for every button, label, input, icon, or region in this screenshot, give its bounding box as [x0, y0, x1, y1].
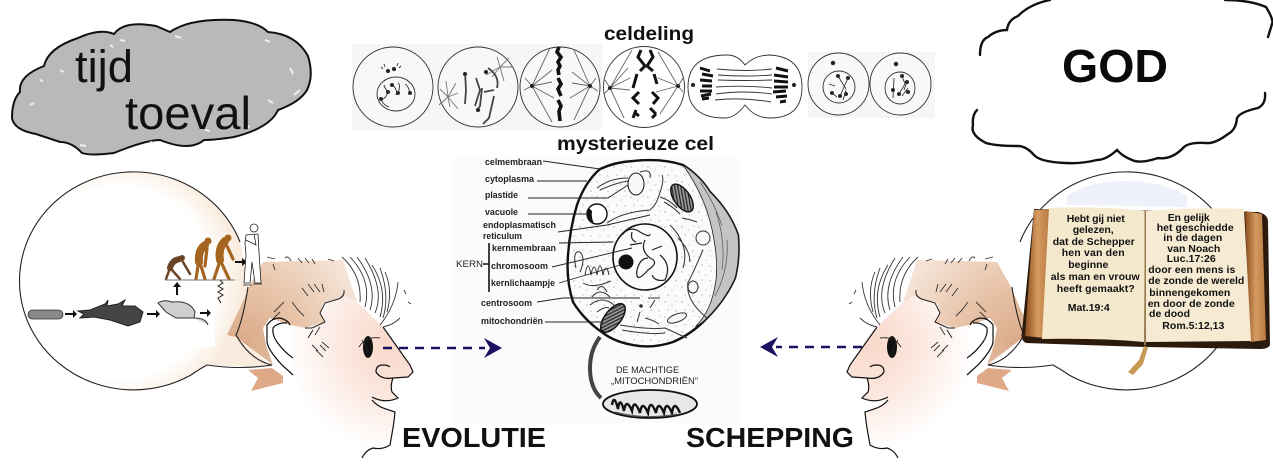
heading: celdeling: celdeling	[604, 24, 694, 45]
text: tijd: tijd	[75, 41, 133, 92]
plastide	[628, 173, 644, 195]
evolution chain	[28, 224, 262, 347]
left page text: heeft gemaakt?	[1057, 283, 1135, 295]
right page text: Rom.5:12,13	[1162, 320, 1224, 332]
eye	[359, 336, 380, 358]
arrow: right gaze	[760, 337, 878, 357]
hairline zigzag	[916, 290, 955, 338]
right page text: de dood	[1149, 308, 1190, 320]
icon: thinking man	[243, 224, 262, 285]
text: toeval: toeval	[125, 87, 251, 139]
left page text: als man en vrouw	[1051, 271, 1141, 283]
book cover	[1022, 209, 1270, 349]
cell labels: centrosoom	[481, 298, 532, 308]
right page text: Luc.17:26	[1167, 253, 1216, 265]
cell stage 5	[604, 46, 684, 128]
cell labels: kernlichaampje	[491, 278, 555, 288]
right page text: En gelijk	[1168, 212, 1210, 224]
right page text	[1148, 212, 1244, 332]
right page text: de zonde de wereld	[1148, 275, 1244, 287]
cell labels: „MITOCHONDRIËN”	[611, 376, 698, 386]
right page edges	[1245, 211, 1266, 342]
hair shading	[227, 260, 357, 365]
hairline zigzag	[305, 290, 344, 338]
cloud: tijd toeval	[12, 20, 311, 154]
face profile	[847, 327, 898, 458]
thought bubble	[19, 172, 272, 390]
cell labels: vacuole	[485, 207, 518, 217]
bookmark	[1128, 346, 1148, 375]
cell labels: DE MACHTIGE	[616, 365, 679, 375]
icon: mouse	[158, 301, 208, 325]
left page text: gelezen,	[1073, 224, 1114, 236]
text: GOD: GOD	[1062, 40, 1168, 92]
bubble outline	[988, 172, 1241, 390]
left page text: beginne	[1068, 259, 1108, 271]
cell labels: plastide	[485, 190, 518, 200]
right page	[1146, 208, 1251, 342]
arrow: left gaze	[383, 338, 502, 358]
bubble outline	[19, 172, 272, 390]
right page text: en door de zonde	[1148, 298, 1235, 310]
cell stage 2	[353, 47, 433, 127]
thought bubble	[988, 172, 1241, 390]
left page text: hen van den	[1062, 247, 1125, 259]
head left with thought bubble: evolutie	[19, 172, 413, 458]
icon: open bible	[1022, 181, 1270, 375]
vacuole	[587, 204, 607, 224]
eye	[880, 336, 901, 358]
left page	[1042, 207, 1145, 342]
cell stage 6	[688, 55, 802, 118]
left page text: Mat.19:4	[1068, 302, 1110, 314]
cloud: GOD	[973, 0, 1272, 163]
cell stage 7 left	[808, 53, 869, 115]
upper mitochondrion	[666, 180, 698, 216]
left page text: dat de Schepper	[1053, 236, 1135, 248]
cell labels: KERN	[456, 259, 483, 269]
neck shading	[248, 368, 283, 391]
label: SCHEPPING: SCHEPPING	[686, 422, 854, 453]
right page text: door een mens is	[1148, 264, 1235, 276]
hair shading	[903, 260, 1033, 365]
cell labels: chromosoom	[491, 261, 548, 271]
thick connector	[590, 337, 601, 398]
endoplasmic reticulum	[575, 171, 707, 338]
right page text: het geschiedde	[1157, 222, 1234, 234]
icon: worm	[28, 310, 63, 319]
lower mitochondrion	[596, 300, 630, 336]
arrows	[65, 262, 243, 314]
cell body	[568, 160, 739, 346]
cell stage 3	[438, 47, 518, 127]
small vacuoles	[666, 231, 710, 325]
hair strokes	[267, 257, 411, 357]
enlarged mitochondrion	[603, 390, 697, 418]
panel: mysterieuze cel diagram	[453, 157, 741, 423]
ear	[967, 318, 993, 375]
hair strokes	[849, 257, 993, 357]
heading: mysterieuze cel: mysterieuze cel	[557, 134, 714, 155]
ear	[267, 318, 293, 375]
pale patch behind book	[1067, 181, 1187, 207]
label: EVOLUTIE: EVOLUTIE	[402, 422, 546, 453]
right page text: binnengekomen	[1149, 287, 1230, 299]
KERN bracket	[483, 243, 489, 292]
cell labels	[456, 157, 698, 386]
cell stage 4	[520, 47, 600, 127]
icon: apes	[166, 234, 233, 279]
neck shading	[977, 368, 1012, 391]
face profile	[362, 327, 413, 458]
left page edges	[1025, 209, 1050, 338]
cell stage 7 right	[870, 53, 931, 115]
cell labels: reticulum	[483, 231, 522, 241]
cell labels: cytoplasma	[485, 174, 535, 184]
left page text	[1051, 213, 1141, 314]
face	[847, 296, 972, 458]
face	[288, 296, 413, 458]
right page text: in de dagen	[1163, 232, 1222, 244]
cell labels: kernmembraan	[492, 243, 556, 253]
label leader lines	[528, 161, 650, 322]
head right with thought bubble: schepping	[847, 172, 1241, 458]
left page text: Hebt gij niet	[1067, 213, 1125, 225]
nucleus	[613, 224, 677, 290]
cell labels: celmembraan	[485, 157, 542, 167]
cell labels: endoplasmatisch	[483, 220, 556, 230]
right page text: van Noach	[1167, 243, 1220, 255]
panel: celdeling diagrams	[352, 44, 935, 130]
cell labels: mitochondriën	[481, 316, 543, 326]
outer crescent	[683, 165, 739, 326]
icon: coelacanth	[78, 300, 143, 326]
